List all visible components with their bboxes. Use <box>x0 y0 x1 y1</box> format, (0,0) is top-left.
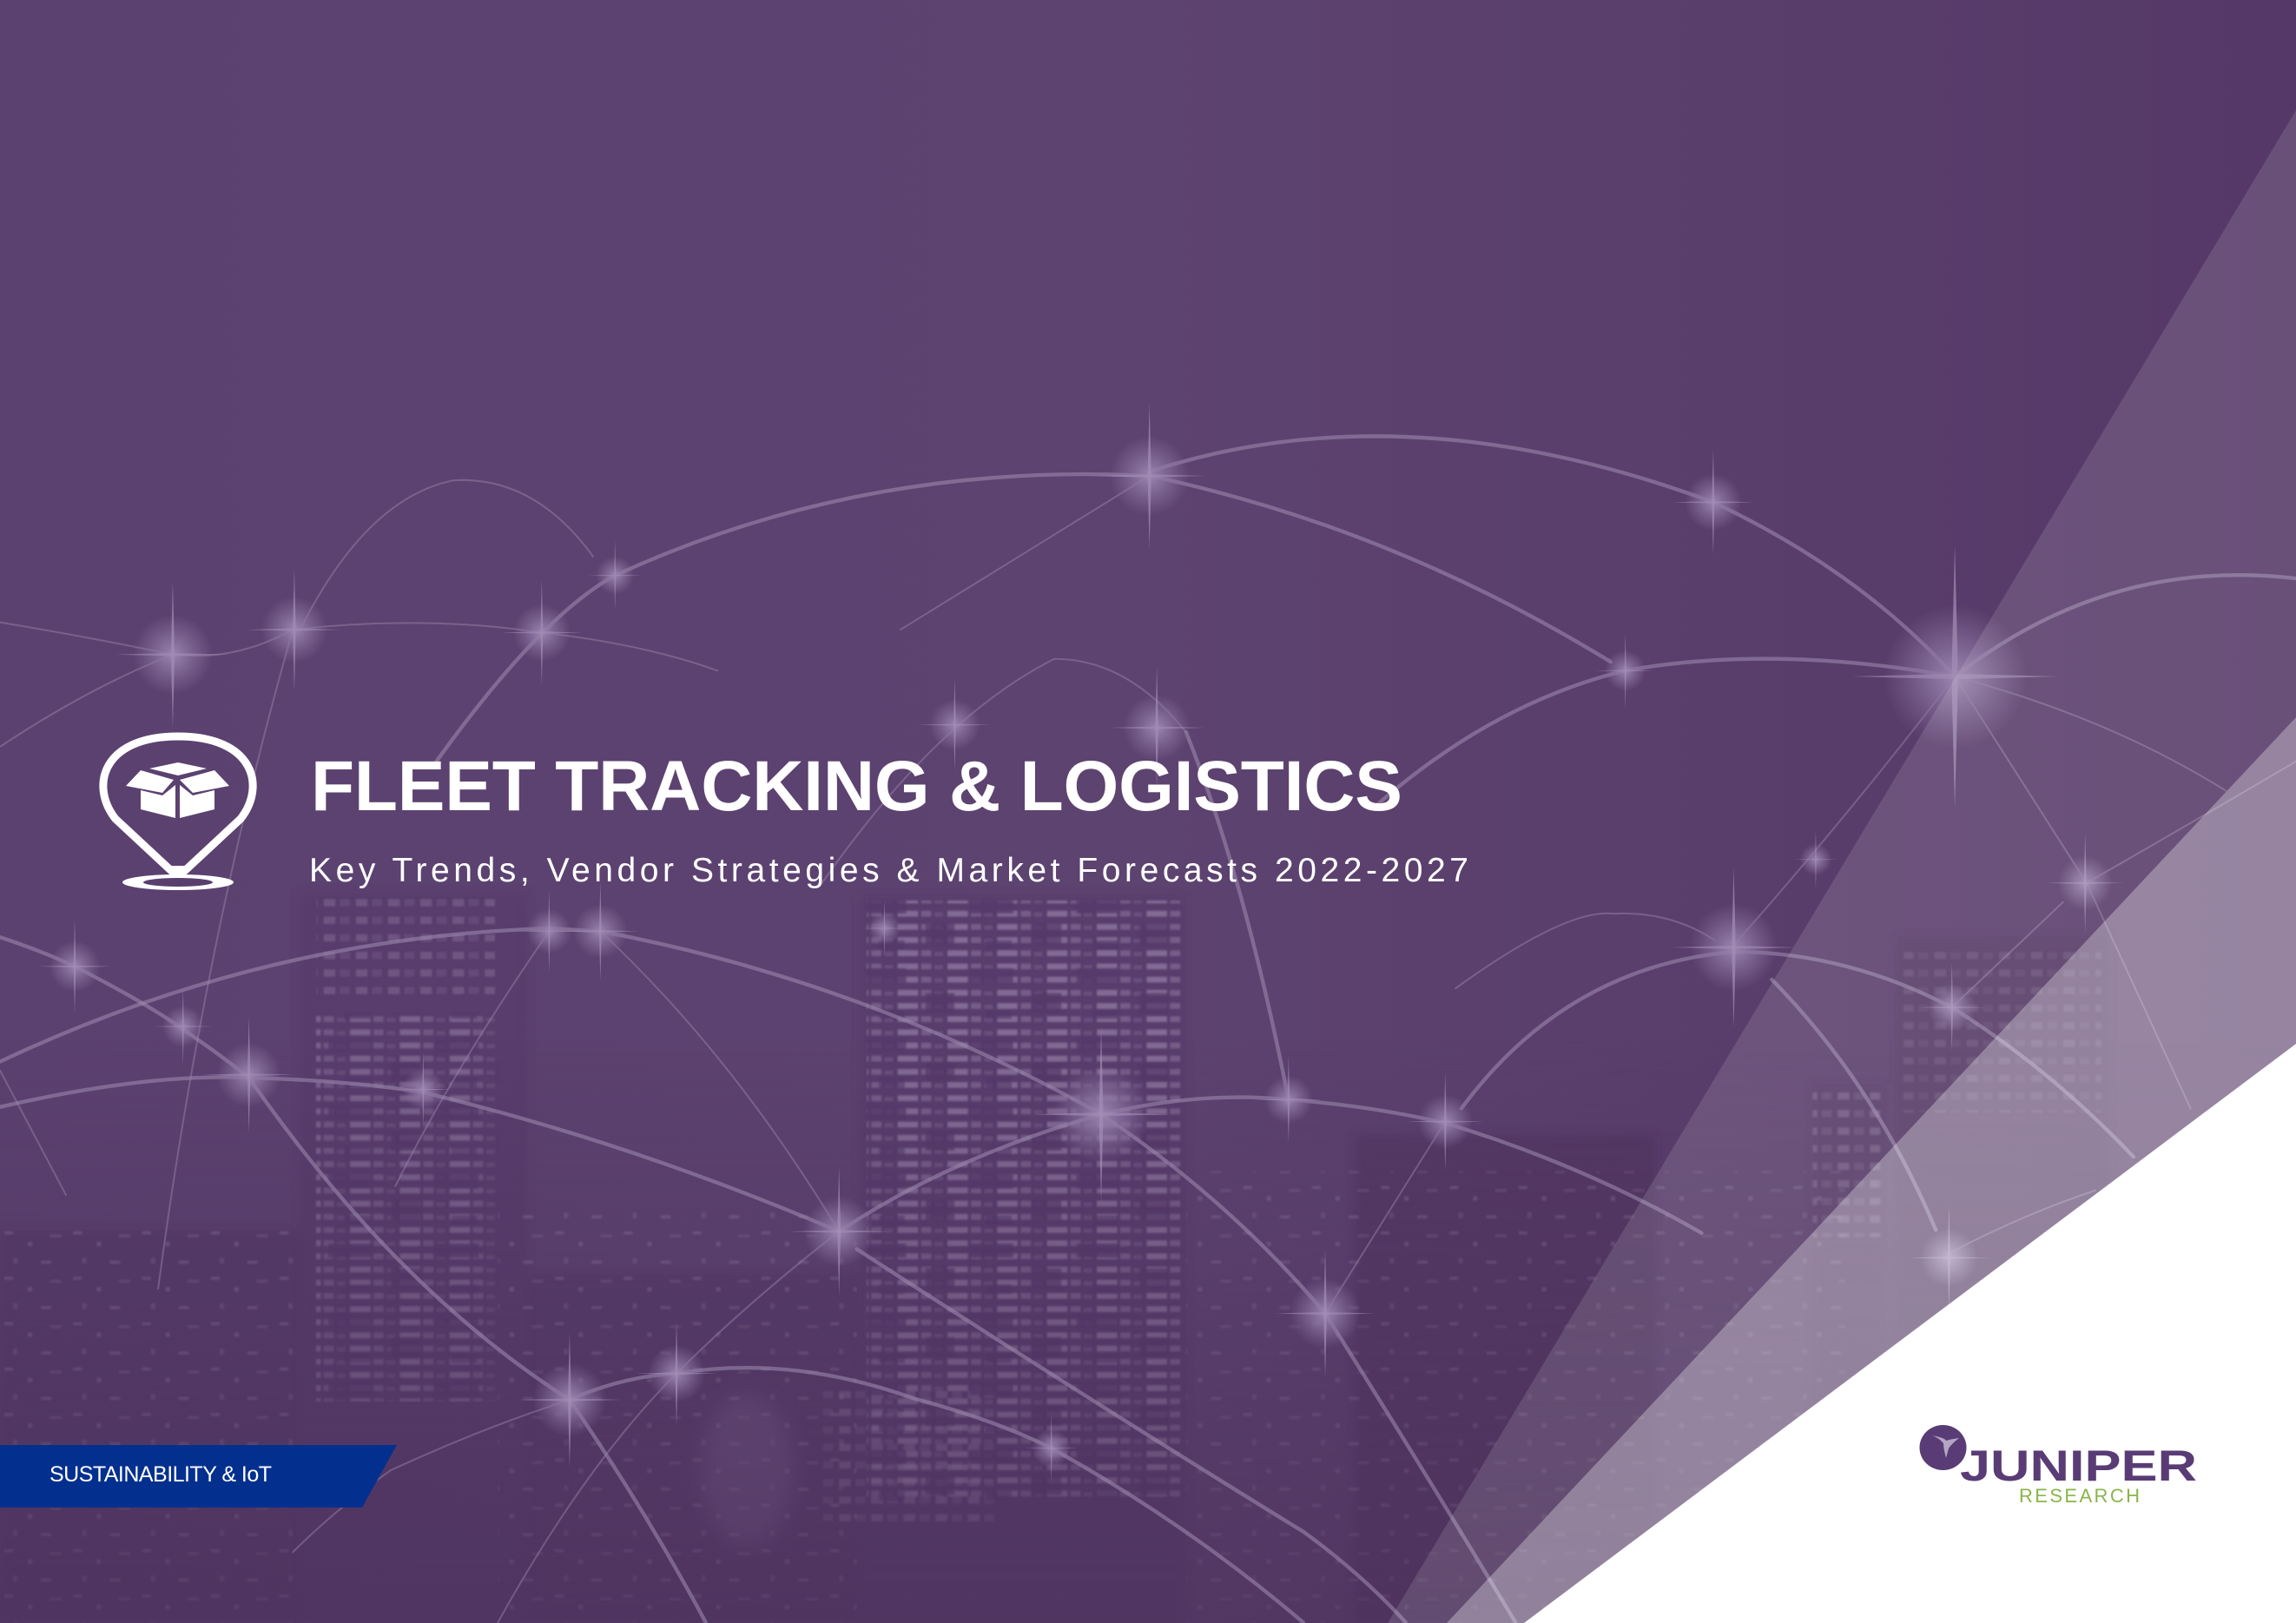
title: FLEET TRACKING & LOGISTICS <box>311 747 1402 826</box>
category banner <box>0 1445 397 1508</box>
network stars <box>38 403 2124 1483</box>
translucent wedge: inner <box>1447 717 2296 1623</box>
logo: Juniper Research <box>1919 1425 2197 1507</box>
icon: parcel location pin <box>103 736 253 890</box>
logo: Juniper Research: JUNIPER <box>1960 1442 2197 1490</box>
subtitle: Key Trends, Vendor Strategies & Market Forecasts 2022-2027 <box>309 852 1468 889</box>
logo: Juniper Research: RESEARCH <box>2019 1485 2140 1507</box>
skyline: buildings and windows <box>0 894 2108 1623</box>
network arcs <box>0 436 2296 1622</box>
category banner: SUSTAINABILITY & IoT <box>49 1462 272 1487</box>
white corner wedge <box>1524 1044 2296 1623</box>
translucent wedge: outer <box>1388 110 2296 1623</box>
